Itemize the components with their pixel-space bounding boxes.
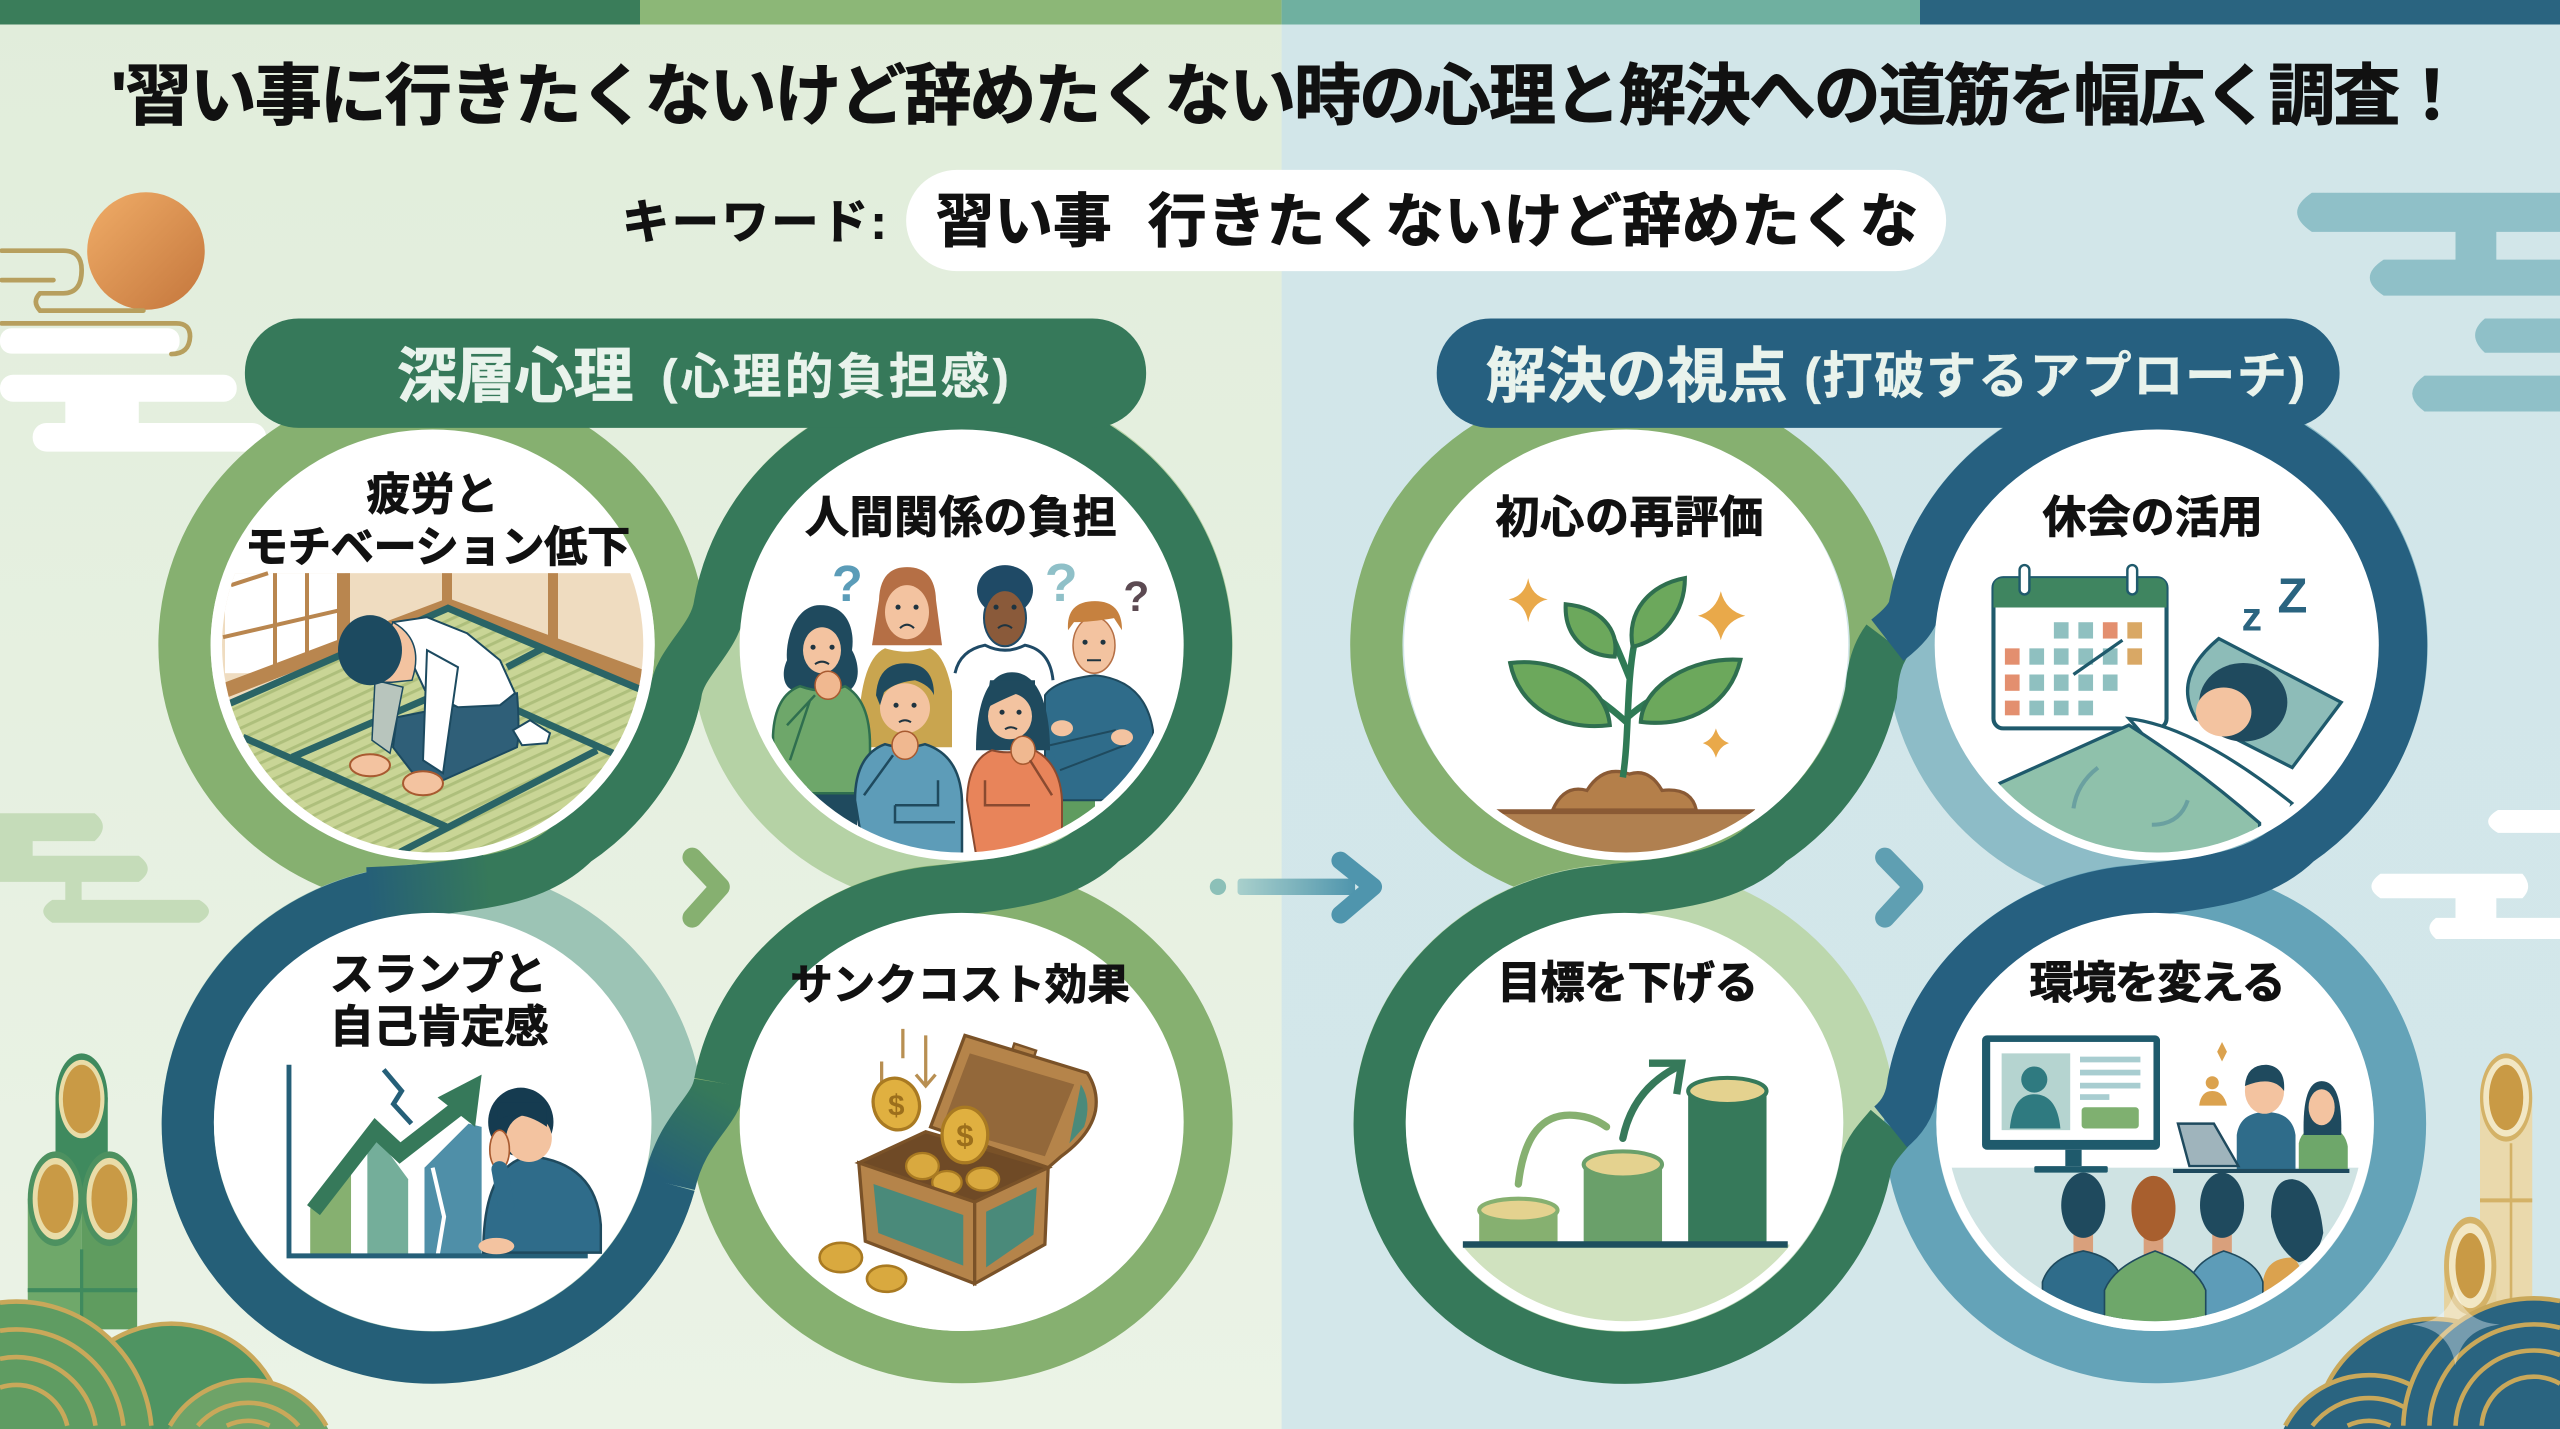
icon: sun with gold lines xyxy=(2,192,205,354)
icon: treasure chest with coins: $ xyxy=(956,1118,974,1153)
heading: right pill xyxy=(1437,318,2340,428)
panel: change environment xyxy=(1936,913,2377,1347)
label: motivation: モチベーション低下 xyxy=(245,524,630,572)
heading sub text: (打破するアプローチ) xyxy=(1804,348,2305,405)
label: change environment: 環境を変える xyxy=(2029,959,2286,1008)
label: slump: スランプと xyxy=(330,951,547,1000)
title: '習い事に行きたくないけど辞めたくない時の心理と解決への道筋を幅広く調査！ xyxy=(111,59,2465,134)
top colour bar xyxy=(0,0,2560,24)
icon: sparkle mark xyxy=(2411,1287,2500,1365)
cloud: green left middle xyxy=(0,813,209,923)
label: sunk cost: サンクコスト効果 xyxy=(790,961,1130,1008)
cloud: white left top xyxy=(0,328,266,452)
decoration: right wave pattern xyxy=(2284,1298,2560,1429)
icon: calendar xyxy=(1993,565,2167,728)
icon: man bowing on tatami xyxy=(215,573,650,860)
icon: question marks: ? xyxy=(1123,573,1149,620)
heading: left pill xyxy=(245,318,1146,428)
label: relationship burden: 人間関係の負担 xyxy=(805,493,1117,542)
icon: sleeping person in bed xyxy=(1998,636,2344,852)
panel: slump and self esteem xyxy=(214,913,651,1331)
person: blue shirt man xyxy=(1045,601,1153,835)
panel: fatigue and motivation xyxy=(211,430,655,861)
icon: question marks: ? xyxy=(1045,553,1078,613)
cloud: teal top right xyxy=(2297,193,2560,353)
panel: lower the goal xyxy=(1406,913,1843,1342)
label: self esteem: 自己肯定感 xyxy=(330,1003,549,1052)
icon: z letters: z xyxy=(2242,593,2262,639)
keyword row xyxy=(622,170,1946,271)
heading sub text: (心理的負担感) xyxy=(661,351,1009,405)
icon: question marks: ? xyxy=(832,555,863,612)
label: fatigue: 疲労と xyxy=(367,471,499,520)
cloud: teal lower bar xyxy=(2412,376,2560,412)
person: orange front woman xyxy=(967,672,1062,860)
person: white shirt man xyxy=(952,565,1054,748)
panel: use of leave xyxy=(1935,430,2379,882)
keyword pill xyxy=(906,170,1946,271)
chart: rising bars with crack xyxy=(289,1065,588,1256)
cloud: white right middle xyxy=(2371,810,2560,939)
arrow: centre xyxy=(1210,861,1373,915)
keyword label: キーワード: xyxy=(622,196,887,249)
decoration: right bamboo xyxy=(2444,1053,2532,1347)
person: mustard shirt woman xyxy=(858,567,957,747)
panel: sunk cost effect xyxy=(740,913,1184,1331)
decoration: left wave pattern xyxy=(0,1302,328,1429)
icon: monitor and online class xyxy=(1952,1035,2358,1322)
decoration: left bamboo xyxy=(28,1053,137,1329)
panel: right ring cluster xyxy=(1376,407,2402,1358)
chart: rising cylinders xyxy=(1463,1063,1789,1342)
label: use of leave: 休会の活用 xyxy=(2042,493,2263,542)
heading text: deep psychology: 深層心理 xyxy=(397,342,633,410)
arrow: right chevron xyxy=(1885,857,1913,918)
panel: left ring cluster xyxy=(184,407,1207,1358)
icon: dejected person xyxy=(478,1088,601,1254)
keyword text two: 行きたくないけど辞めたくな xyxy=(1148,190,1918,255)
icon: worried group of people xyxy=(773,565,1153,860)
label: lower the goal: 目標を下げる xyxy=(1497,959,1758,1008)
person: blue front man xyxy=(855,663,962,860)
icon: treasure chest with coins: $ xyxy=(888,1089,904,1122)
icon: sprouting plant xyxy=(1496,578,1755,882)
icon: treasure chest with coins xyxy=(820,1029,1096,1292)
icon: z letters: Z xyxy=(2278,569,2307,623)
keyword text one: 習い事 xyxy=(936,190,1112,255)
icon: question marks xyxy=(832,553,1149,620)
panel: re-evaluate beginner mindset xyxy=(1404,430,1848,882)
heading text: solution viewpoint: 解決の視点 xyxy=(1486,342,1788,410)
panel: relationship burden xyxy=(740,430,1184,861)
label: re-evaluate: 初心の再評価 xyxy=(1496,493,1763,542)
person: green shirt woman xyxy=(773,605,870,830)
arrow: left chevron xyxy=(692,857,720,918)
icon: z letters xyxy=(2242,569,2307,639)
